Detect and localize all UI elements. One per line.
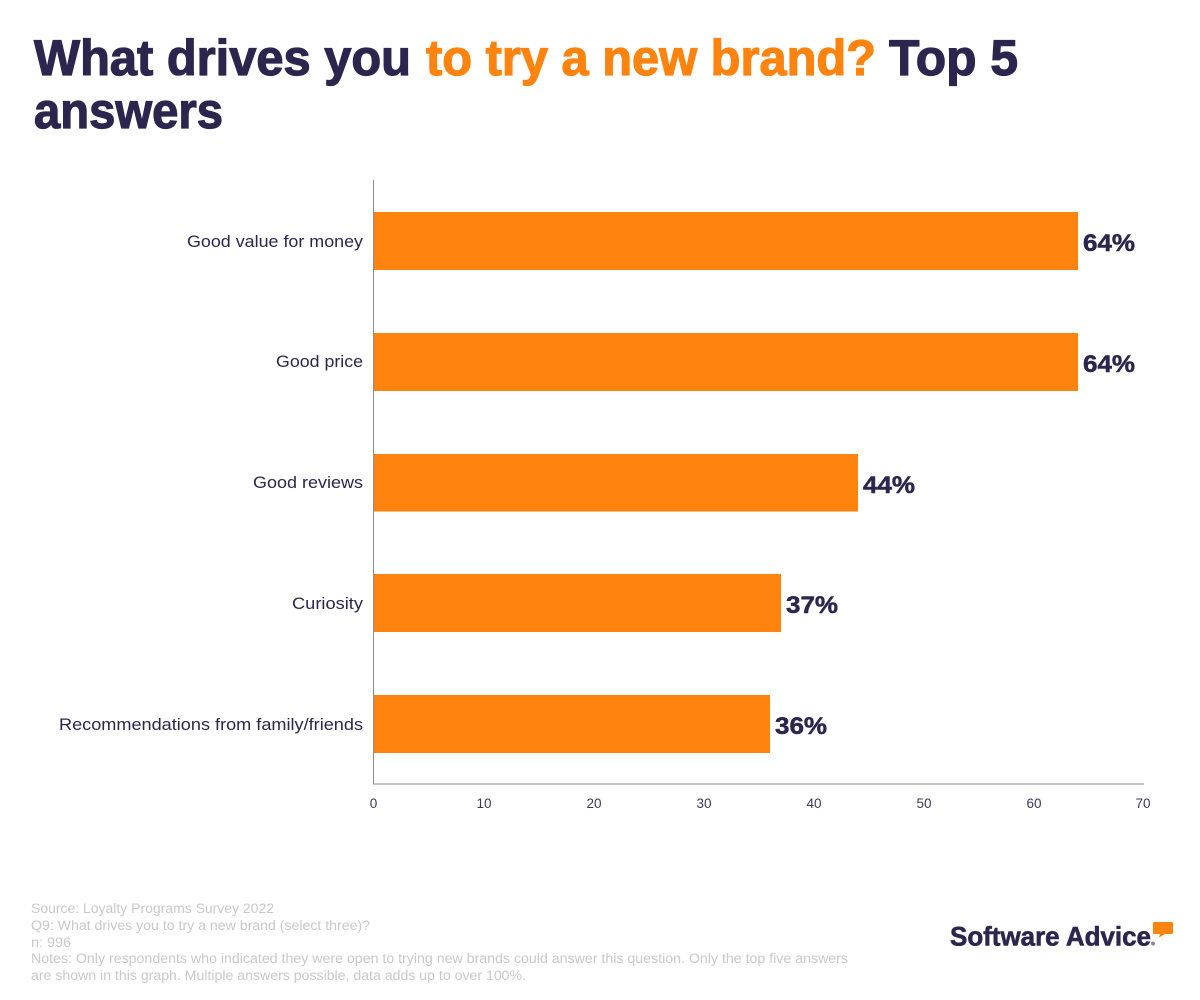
source notes: Q9: What drives you to try a new brand (select three)? [31, 918, 370, 933]
title: Top 5 [889, 30, 1018, 86]
value labels: 64% [1083, 351, 1135, 378]
source notes [31, 901, 848, 983]
category labels: Curiosity [292, 594, 364, 613]
title [34, 30, 1018, 139]
title: to try a new brand? [426, 30, 876, 86]
axes [373, 180, 1144, 784]
x axis ticks [370, 796, 1151, 811]
source notes: n: 996 [31, 935, 71, 950]
x axis ticks: 70 [1135, 796, 1151, 811]
source notes: Notes: Only respondents who indicated they were open to trying new brands could answer this question. Only the top five answers [31, 951, 848, 966]
value labels: 36% [775, 713, 827, 740]
registered mark [1151, 942, 1155, 946]
icon: speech bubble [1153, 922, 1173, 938]
category labels [59, 232, 364, 734]
source notes: are shown in this graph. Multiple answers possible, data adds up to over 100%. [31, 968, 526, 983]
category labels: Recommendations from family/friends [59, 715, 363, 734]
category labels: Good reviews [253, 473, 363, 492]
x axis ticks: 50 [916, 796, 932, 811]
title: answers [34, 83, 223, 139]
logo: Software Advice: Software Advice [950, 922, 1151, 952]
x axis ticks: 40 [806, 796, 822, 811]
x axis ticks: 0 [370, 796, 377, 811]
bar chart [59, 180, 1151, 811]
x axis ticks: 20 [586, 796, 602, 811]
value labels: 37% [786, 592, 838, 619]
bars [374, 212, 1078, 753]
category labels: Good value for money [187, 232, 364, 251]
x axis ticks: 60 [1026, 796, 1042, 811]
title: What drives you [34, 30, 411, 86]
source notes: Source: Loyalty Programs Survey 2022 [31, 901, 274, 916]
value labels: 64% [1083, 230, 1135, 257]
value labels: 44% [863, 472, 915, 499]
x axis ticks: 30 [696, 796, 712, 811]
value labels [775, 230, 1135, 740]
category labels: Good price [276, 352, 363, 371]
x axis ticks: 10 [476, 796, 492, 811]
